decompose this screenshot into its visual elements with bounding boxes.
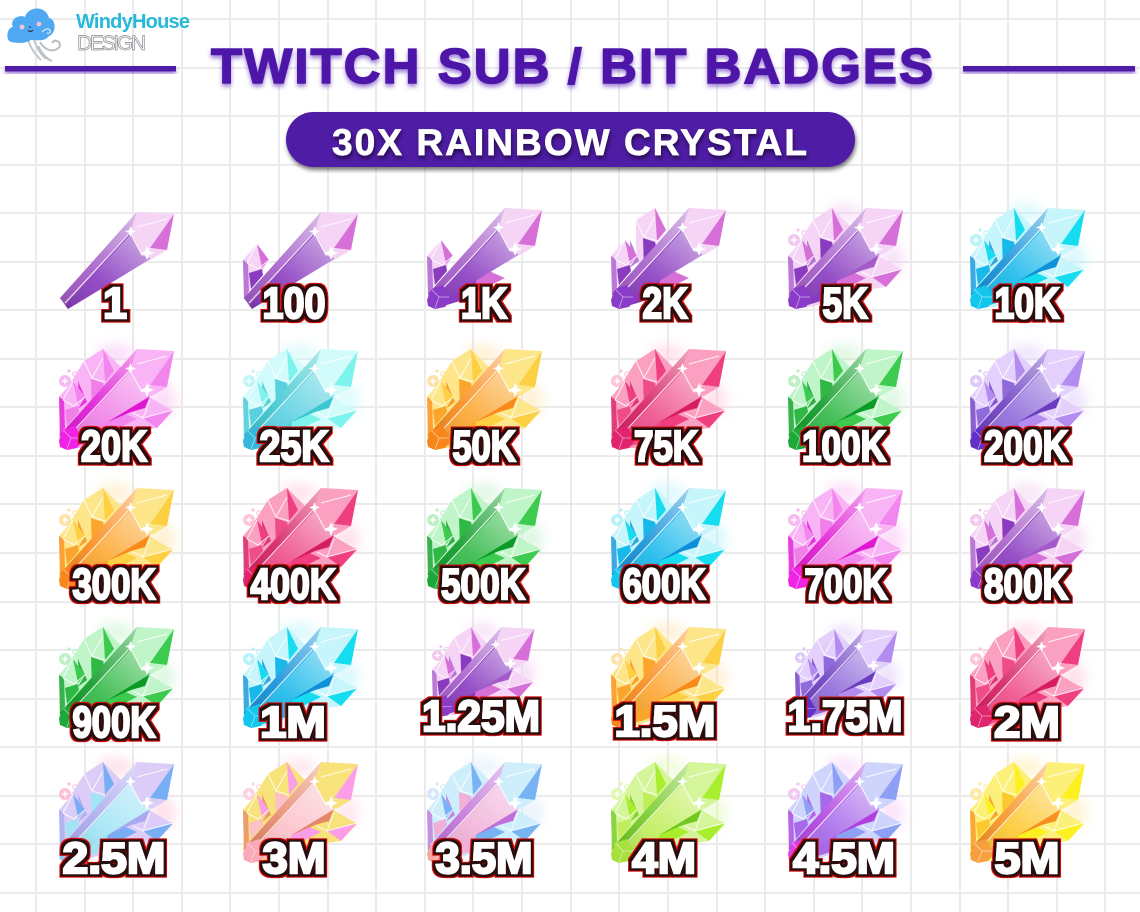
badge: 4.5M bbox=[788, 758, 904, 883]
badge: 100 bbox=[243, 212, 358, 328]
label: 2K bbox=[642, 279, 688, 328]
crystal bbox=[970, 484, 1086, 589]
badge: 2.5M bbox=[59, 758, 175, 883]
label: 10K bbox=[994, 279, 1060, 328]
badge: 10K bbox=[970, 204, 1086, 328]
badge: 1K bbox=[427, 208, 542, 328]
crystal bbox=[611, 758, 727, 863]
badge: 25K bbox=[243, 345, 359, 471]
label: 600K bbox=[622, 560, 706, 609]
badge: 100K bbox=[788, 345, 904, 471]
badge: 5M bbox=[970, 758, 1086, 883]
label: 100 bbox=[262, 279, 326, 328]
label: 2M bbox=[994, 698, 1060, 747]
badge: 2M bbox=[970, 623, 1086, 747]
icon: cloud with wind swirls bbox=[7, 8, 60, 61]
badge: 20K bbox=[59, 345, 175, 471]
logo text: DESIGN: DESIGN bbox=[77, 32, 146, 55]
crystal bbox=[432, 624, 535, 717]
label: 4M bbox=[632, 834, 696, 883]
crystal bbox=[788, 204, 904, 309]
subtitle text: 30X RAINBOW CRYSTAL bbox=[332, 122, 807, 163]
crystal bbox=[611, 623, 727, 728]
crystal bbox=[788, 484, 904, 589]
crystal bbox=[611, 208, 726, 309]
badge: 50K bbox=[427, 345, 543, 471]
badge: 3.5M bbox=[427, 758, 543, 883]
label: 1M bbox=[260, 698, 326, 747]
badge: 800K bbox=[970, 484, 1086, 609]
badge: 500K bbox=[427, 484, 543, 609]
crystal bbox=[243, 484, 359, 589]
badge: 300K bbox=[59, 484, 175, 609]
crystal bbox=[243, 345, 359, 450]
label: 1 bbox=[103, 279, 127, 328]
subtitle pill bbox=[286, 112, 855, 167]
badge: 400K bbox=[243, 484, 359, 609]
badge: 900K bbox=[59, 623, 175, 747]
badge: 2K bbox=[611, 208, 726, 328]
title: TWITCH SUB / BIT BADGES bbox=[211, 40, 935, 94]
label: 700K bbox=[804, 560, 888, 609]
logo text: WindyHouse: WindyHouse bbox=[76, 11, 190, 33]
label: 1.25M bbox=[422, 692, 540, 741]
badge: 3M bbox=[243, 758, 359, 883]
label: 20K bbox=[81, 422, 147, 471]
crystal bbox=[427, 345, 543, 450]
crystal bbox=[788, 345, 904, 450]
crystal bbox=[60, 212, 174, 309]
label: 3.5M bbox=[436, 834, 532, 883]
label: 25K bbox=[260, 422, 329, 471]
header rule: right bbox=[963, 66, 1135, 72]
crystal bbox=[243, 623, 359, 728]
crystal bbox=[243, 212, 358, 309]
logo: WindyHouse Design bbox=[7, 8, 190, 61]
crystal bbox=[970, 204, 1086, 309]
label: 1.75M bbox=[788, 692, 902, 741]
label: 2.5M bbox=[62, 834, 166, 883]
header rule: left bbox=[5, 66, 176, 72]
crystal bbox=[243, 758, 359, 863]
crystal bbox=[59, 623, 175, 728]
crystal bbox=[970, 345, 1086, 450]
badge: 75K bbox=[611, 345, 727, 471]
badge: 1 bbox=[60, 212, 174, 328]
badge: 200K bbox=[970, 345, 1086, 471]
badge: 4M bbox=[611, 758, 727, 883]
crystal bbox=[611, 484, 727, 589]
badge: 1.25M bbox=[422, 624, 540, 741]
crystal bbox=[59, 345, 175, 450]
crystal bbox=[795, 626, 898, 719]
crystal bbox=[970, 758, 1086, 863]
label: 500K bbox=[441, 560, 525, 609]
badge: 600K bbox=[611, 484, 727, 609]
label: 3M bbox=[262, 834, 326, 883]
label: 1.5M bbox=[614, 697, 716, 746]
badge: 5K bbox=[788, 204, 904, 328]
crystal bbox=[611, 345, 727, 450]
label: 5K bbox=[822, 279, 868, 328]
label: 1K bbox=[461, 279, 507, 328]
crystal bbox=[59, 758, 175, 863]
label: 75K bbox=[634, 422, 698, 471]
label: 300K bbox=[72, 560, 156, 609]
badge: 700K bbox=[788, 484, 904, 609]
label: 400K bbox=[250, 560, 336, 609]
label: 200K bbox=[984, 422, 1068, 471]
badge: 1.75M bbox=[788, 626, 902, 741]
label: 5M bbox=[994, 834, 1060, 883]
badge: 1M bbox=[243, 623, 359, 747]
badge: 1.5M bbox=[611, 623, 727, 746]
crystal bbox=[427, 208, 542, 309]
label: 800K bbox=[984, 560, 1068, 609]
crystal bbox=[59, 484, 175, 589]
crystal bbox=[970, 623, 1086, 728]
label: 50K bbox=[452, 422, 516, 471]
crystal bbox=[427, 484, 543, 589]
label: 900K bbox=[72, 698, 156, 747]
label: 100K bbox=[802, 422, 886, 471]
crystal bbox=[788, 758, 904, 863]
label: 4.5M bbox=[793, 834, 895, 883]
crystal bbox=[427, 758, 543, 863]
